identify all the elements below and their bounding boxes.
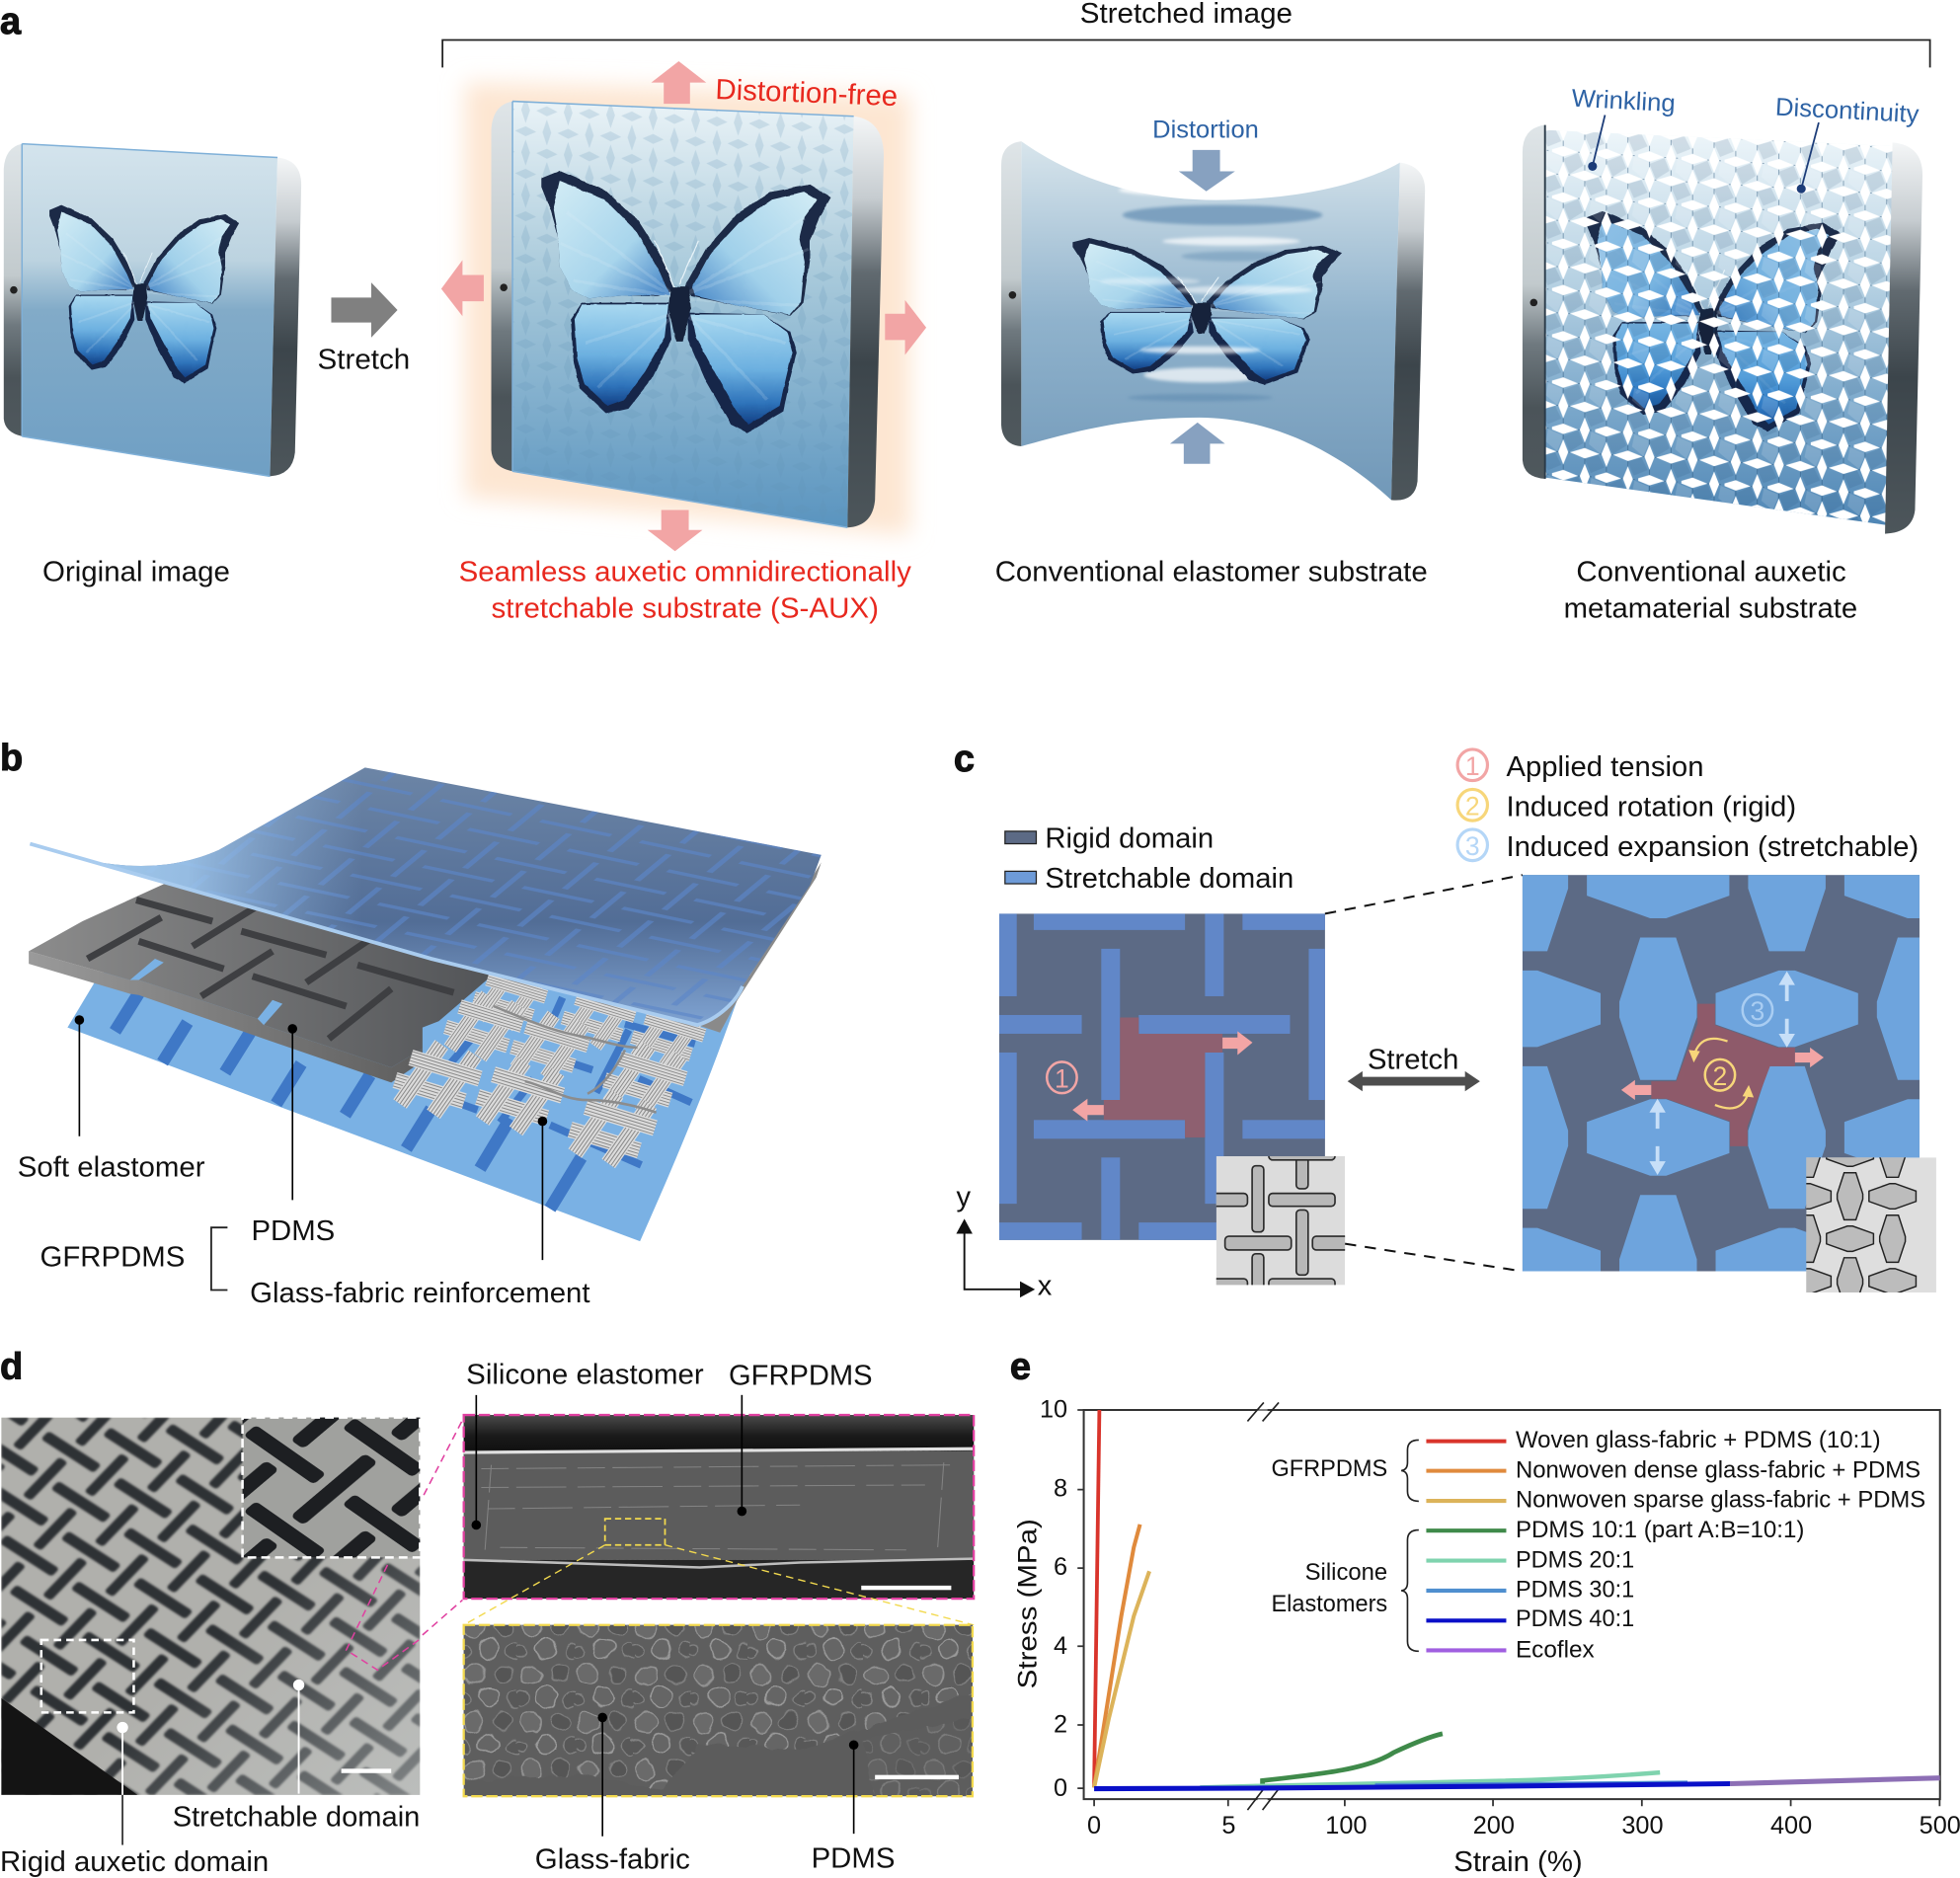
y tick labels: 10 bbox=[1040, 1396, 1067, 1424]
legend bbox=[1426, 1427, 1925, 1664]
legend: mechanism steps: Applied tension bbox=[1506, 751, 1703, 783]
scale bar bbox=[342, 1768, 391, 1773]
inset photo: unstretched sample bbox=[1216, 1156, 1345, 1286]
legend: domains bbox=[1005, 822, 1294, 895]
x tick labels bbox=[1087, 1812, 1960, 1839]
layer: glass-fabric reinforcement bbox=[393, 964, 706, 1168]
arrow: compress down bbox=[1179, 150, 1235, 192]
x tick labels: 500 bbox=[1920, 1812, 1960, 1839]
callout: GFRPDMS: GFRPDMS bbox=[729, 1361, 873, 1392]
group label: silicone elastomers with brace bbox=[1271, 1530, 1419, 1651]
label: GFRPDMS with bracket bbox=[40, 1227, 227, 1290]
axes: x y: x bbox=[1038, 1271, 1053, 1302]
legend: mechanism steps: Induced expansion (stretchable) bbox=[1506, 831, 1919, 863]
legend: Ecoflex bbox=[1516, 1637, 1595, 1664]
photo inset: magnified view bbox=[243, 1418, 420, 1557]
bracket over stretched images bbox=[442, 40, 1930, 67]
legend: mechanism steps: 3 bbox=[1465, 831, 1480, 861]
photo: fabricated substrate bbox=[1, 1418, 420, 1795]
arrows: expansion upper bbox=[1778, 972, 1795, 1048]
label: distortion-free: Distortion-free bbox=[715, 74, 899, 113]
zoom guide lines bbox=[1325, 875, 1523, 1271]
panel label e: e bbox=[1010, 1346, 1031, 1387]
legend: mechanism steps: 2 bbox=[1465, 791, 1480, 821]
caption: S-AUX: stretchable substrate (S-AUX) bbox=[492, 592, 879, 624]
group label: silicone elastomers with brace: Silicone bbox=[1305, 1559, 1387, 1586]
arrow: left bbox=[441, 260, 484, 316]
arrows: expansion lower bbox=[1649, 1099, 1666, 1175]
caption: conventional auxetic bbox=[1564, 557, 1857, 624]
callout: PDMS: PDMS bbox=[251, 1215, 335, 1247]
group label: GFRPDMS with brace: GFRPDMS bbox=[1271, 1455, 1387, 1482]
callout: PDMS bbox=[251, 1024, 335, 1247]
panel label d: d bbox=[0, 1346, 23, 1387]
layer: PDMS rigid sheet bbox=[29, 882, 493, 1082]
device: original image bbox=[4, 144, 301, 476]
arrow: tension right bbox=[1222, 1031, 1252, 1055]
panel a: stretched image comparison bbox=[0, 0, 1930, 624]
inset photo: stretched sample bbox=[1806, 1157, 1936, 1292]
arrow: down bbox=[648, 510, 702, 551]
diagram: stretched lattice bbox=[1523, 875, 1920, 1272]
label: stretch: Stretch bbox=[318, 344, 410, 375]
callout: GFRPDMS bbox=[729, 1361, 873, 1516]
x tick labels: 200 bbox=[1473, 1812, 1515, 1839]
legend: PDMS 20:1 bbox=[1516, 1547, 1634, 1574]
marker: step 1 bbox=[1047, 1061, 1077, 1093]
legend: Nonwoven dense glass-fabric + PDMS bbox=[1516, 1456, 1921, 1483]
arrow: stretch bbox=[331, 282, 398, 338]
caption: S-AUX bbox=[459, 557, 911, 624]
arrow: compress up bbox=[1170, 423, 1225, 464]
callout: glass-fabric reinforcement bbox=[250, 1117, 590, 1309]
caption: S-AUX: Seamless auxetic omnidirectionally bbox=[459, 557, 911, 588]
group label: silicone elastomers with brace: Elastomers bbox=[1271, 1591, 1387, 1617]
SEM: cross section bbox=[464, 1415, 974, 1599]
legend: PDMS 30:1 bbox=[1516, 1576, 1634, 1603]
callout: glass-fabric reinforcement: Glass-fabric reinforcement bbox=[250, 1278, 590, 1309]
callout: glass-fabric bbox=[535, 1713, 690, 1876]
device: conventional auxetic metamaterial bbox=[1523, 125, 1922, 534]
caption: conventional elastomer: Conventional elastomer substrate bbox=[995, 557, 1428, 588]
legend: domains: Stretchable domain bbox=[1045, 863, 1294, 895]
callout: glass-fabric: Glass-fabric bbox=[535, 1844, 690, 1876]
diagram: unstretched lattice bbox=[999, 913, 1325, 1240]
device: S-AUX distortion-free bbox=[465, 83, 910, 535]
SEM: fibres bbox=[451, 1612, 987, 1806]
panel label a: a bbox=[0, 1, 22, 42]
panel c: auxetic mechanism bbox=[954, 747, 1936, 1297]
marker: magnified region bbox=[41, 1640, 133, 1712]
label: wrinkling: Wrinkling bbox=[1571, 85, 1676, 117]
caption: conventional auxetic: metamaterial substrate bbox=[1564, 592, 1857, 624]
panel b: layered structure bbox=[0, 738, 822, 1309]
callout: stretchable domain bbox=[173, 1680, 420, 1834]
arrow: tension left stretched bbox=[1621, 1080, 1651, 1100]
legend: Woven glass-fabric + PDMS (10:1) bbox=[1516, 1427, 1881, 1453]
label: discontinuity bbox=[1774, 94, 1921, 194]
label: GFRPDMS with bracket: GFRPDMS bbox=[40, 1241, 185, 1273]
y tick labels bbox=[1040, 1396, 1067, 1802]
label: stretch: Stretch bbox=[1368, 1044, 1458, 1075]
panel e: stress-strain chart bbox=[1010, 1346, 1960, 1878]
marker: step 3 bbox=[1743, 994, 1772, 1026]
y tick labels: 8 bbox=[1054, 1474, 1067, 1502]
y tick labels: 4 bbox=[1054, 1632, 1067, 1660]
legend: PDMS 10:1 (part A:B=10:1) bbox=[1516, 1517, 1804, 1543]
marker: step 2 with rotation arrows: 2 bbox=[1713, 1061, 1727, 1091]
legend: mechanism steps: Induced rotation (rigid) bbox=[1506, 792, 1796, 823]
layer: top silicone sheet bbox=[30, 767, 822, 1033]
label: discontinuity: Discontinuity bbox=[1774, 94, 1921, 128]
x axis title: Strain (%) bbox=[1453, 1846, 1583, 1878]
axes: x y: y bbox=[956, 1182, 971, 1213]
x tick labels: 100 bbox=[1325, 1812, 1368, 1839]
arrow: tension right stretched bbox=[1795, 1048, 1824, 1067]
x tick labels: 5 bbox=[1221, 1812, 1235, 1839]
callout: silicone elastomer bbox=[466, 1359, 704, 1529]
legend: mechanism steps bbox=[1457, 749, 1919, 863]
caption: conventional auxetic: Conventional auxetic bbox=[1576, 557, 1846, 588]
yellow zoom guide bbox=[464, 1545, 974, 1625]
arrow: right bbox=[885, 300, 926, 355]
x tick labels: 0 bbox=[1087, 1812, 1101, 1839]
device: conventional elastomer bbox=[1001, 141, 1425, 501]
callout: soft elastomer bbox=[18, 1015, 205, 1183]
legend: domains: Rigid domain bbox=[1045, 822, 1214, 854]
arrow: tension left bbox=[1072, 1099, 1104, 1122]
callout: PDMS: PDMS bbox=[812, 1842, 895, 1874]
callout: stretchable domain: Stretchable domain bbox=[173, 1802, 420, 1834]
callout: rigid auxetic domain bbox=[0, 1722, 269, 1878]
marker: step 1: 1 bbox=[1055, 1063, 1069, 1093]
y axis title: Stress (MPa) bbox=[1012, 1519, 1042, 1688]
caption: original image: Original image bbox=[42, 557, 230, 588]
chart frame bbox=[1077, 1402, 1940, 1810]
y tick labels: 6 bbox=[1054, 1553, 1067, 1581]
marker: step 2 with rotation arrows bbox=[1688, 1039, 1754, 1108]
callout: PDMS bbox=[812, 1740, 895, 1874]
layer: soft elastomer with slots bbox=[67, 931, 750, 1241]
arrow: up bbox=[652, 61, 706, 104]
panel label c: c bbox=[954, 739, 975, 780]
legend: PDMS 40:1 bbox=[1516, 1605, 1634, 1632]
curves bbox=[1094, 1410, 1940, 1789]
axes: x y bbox=[956, 1182, 1053, 1302]
y tick labels: 0 bbox=[1054, 1774, 1067, 1802]
magenta zoom guide bbox=[347, 1420, 462, 1670]
x tick labels: 300 bbox=[1621, 1812, 1664, 1839]
y tick labels: 2 bbox=[1054, 1711, 1067, 1739]
callout: soft elastomer: Soft elastomer bbox=[18, 1151, 205, 1183]
x tick labels: 400 bbox=[1770, 1812, 1812, 1839]
callout: rigid auxetic domain: Rigid auxetic domain bbox=[0, 1846, 269, 1878]
label: distortion: Distortion bbox=[1152, 116, 1259, 143]
legend: Nonwoven sparse glass-fabric + PDMS bbox=[1516, 1487, 1925, 1514]
group label: GFRPDMS with brace bbox=[1271, 1440, 1419, 1501]
panel d: photos and SEM bbox=[0, 1346, 987, 1878]
arrow: bidirectional stretch bbox=[1348, 1071, 1480, 1091]
callout: silicone elastomer: Silicone elastomer bbox=[466, 1359, 704, 1390]
label: wrinkling bbox=[1571, 85, 1676, 171]
marker: step 3: 3 bbox=[1751, 996, 1764, 1026]
panel label b: b bbox=[0, 738, 23, 779]
legend: mechanism steps: 1 bbox=[1465, 751, 1480, 781]
